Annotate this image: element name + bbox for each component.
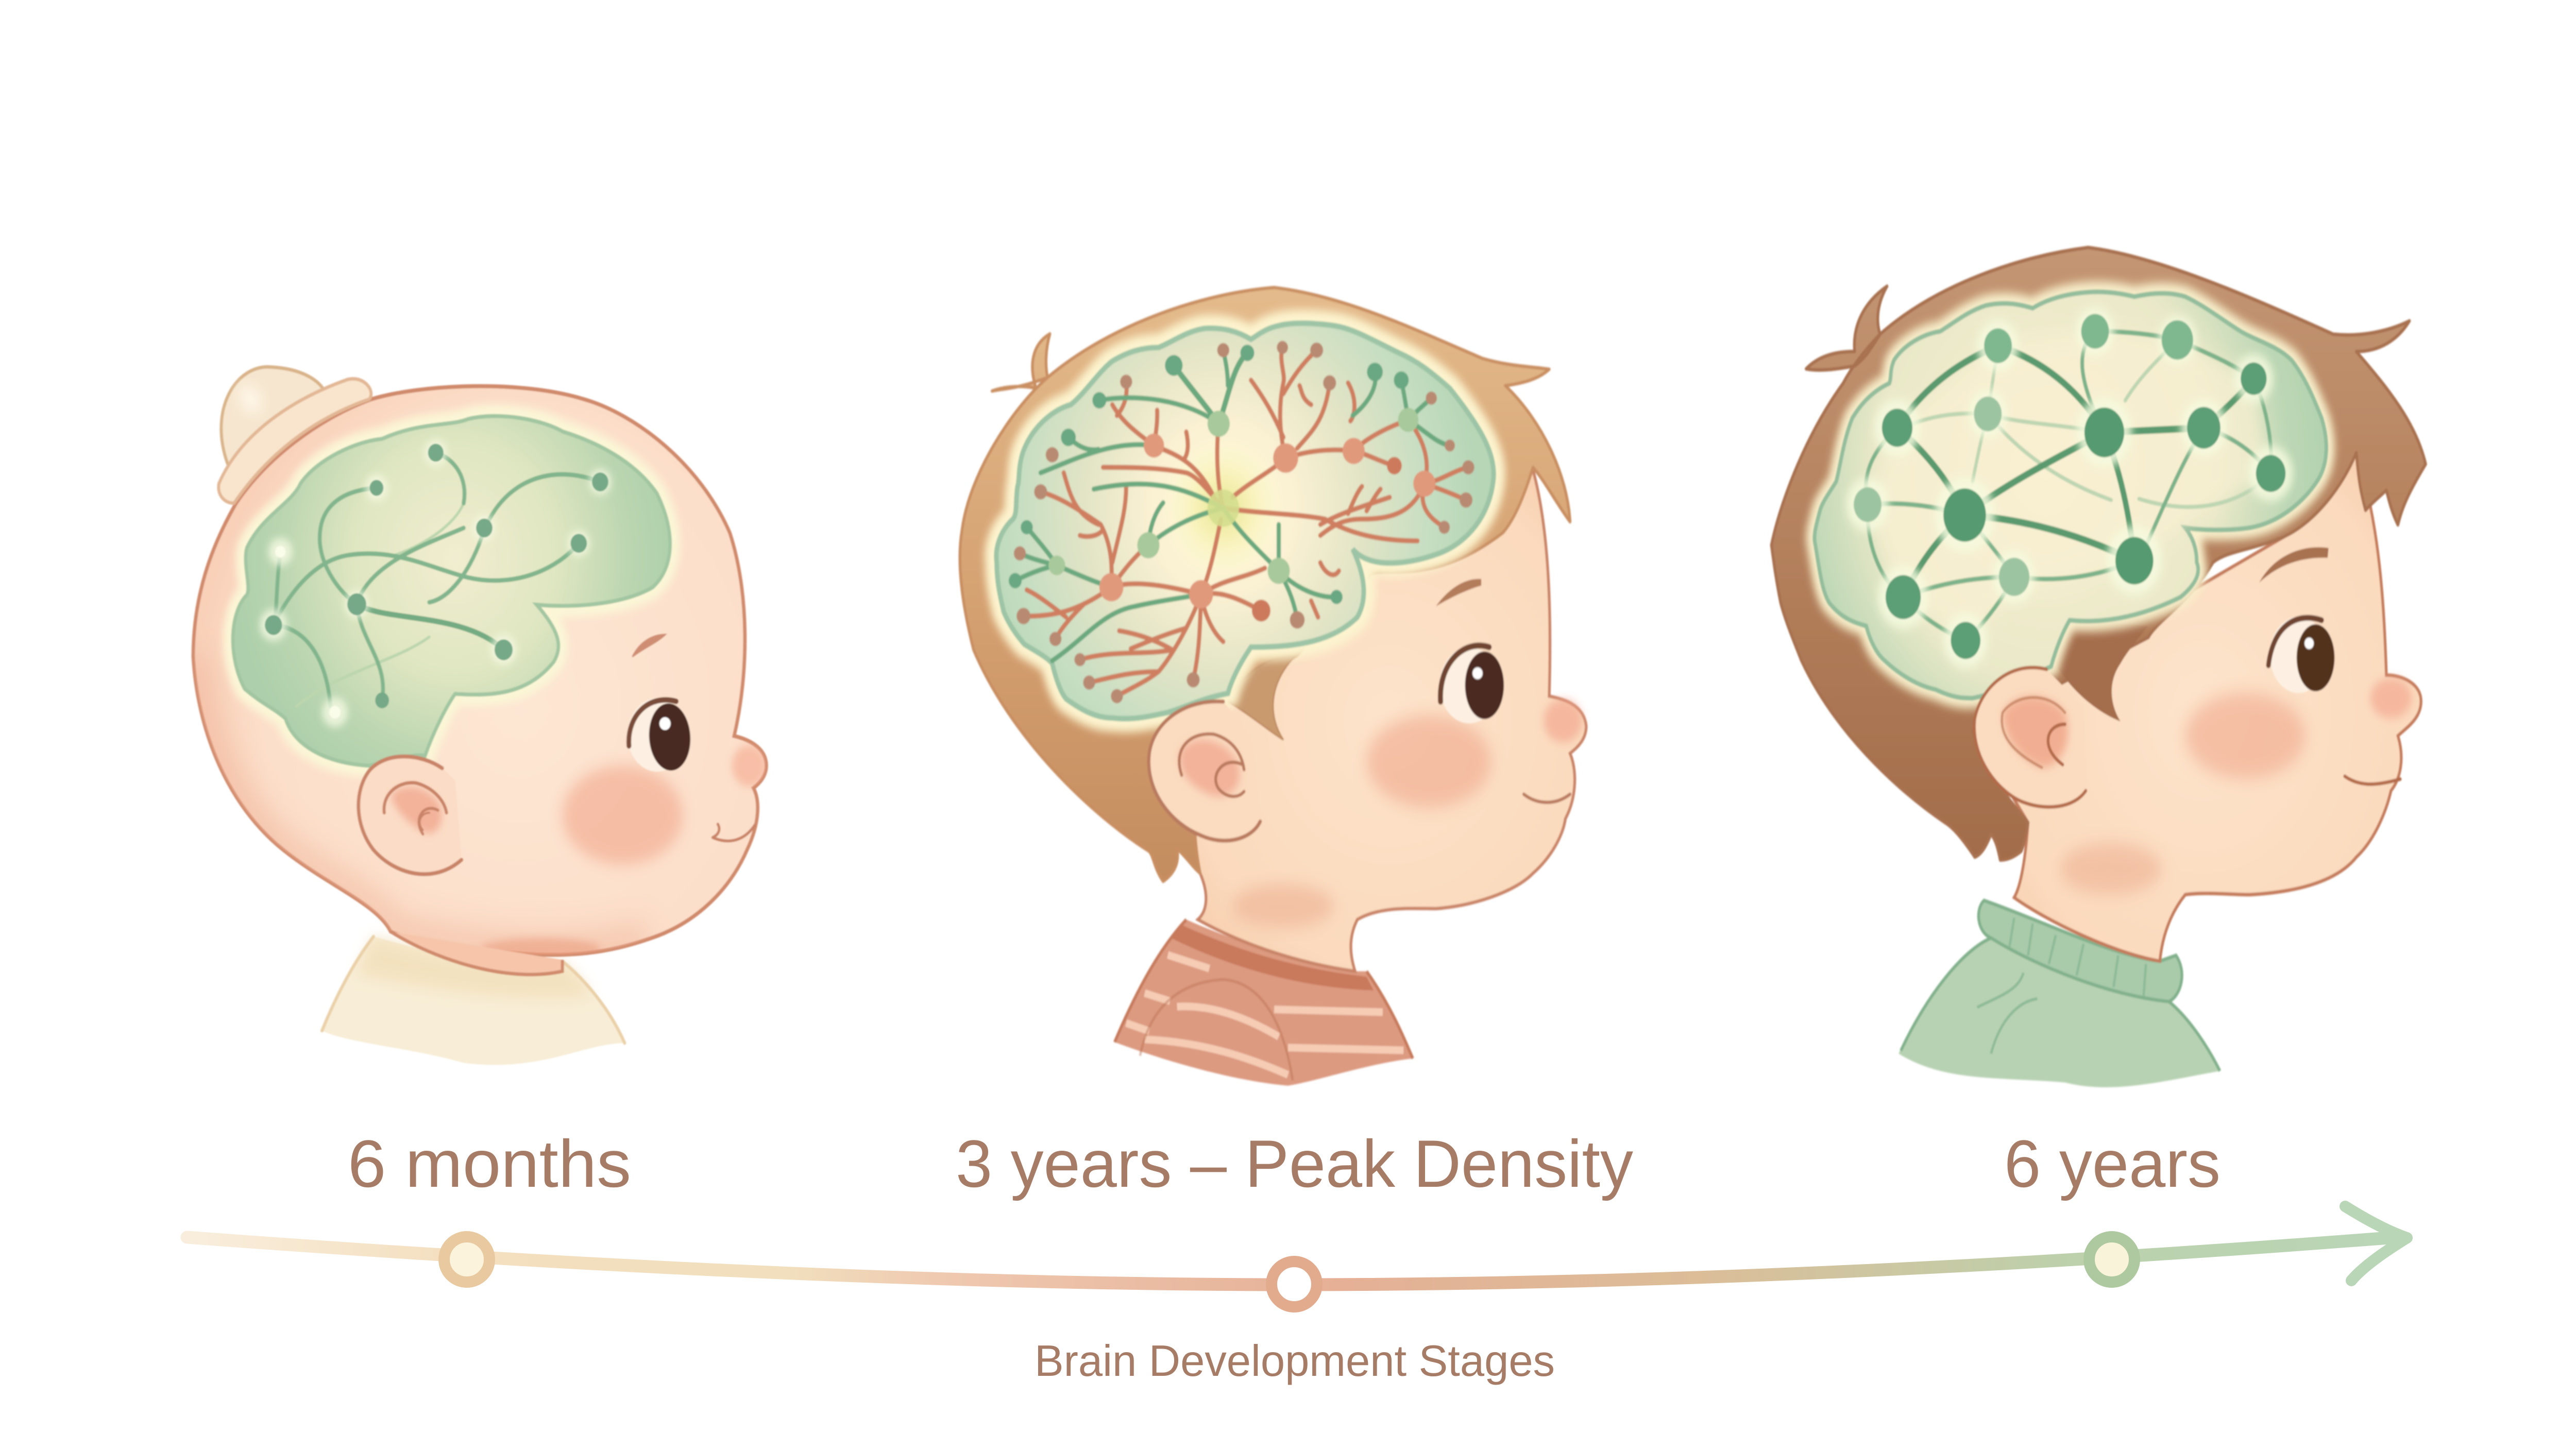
child hair [1771,247,2426,860]
child medium connections [1866,331,2271,640]
toddler eyebrow [1436,579,1481,606]
timeline marker: 6 months [444,1237,489,1282]
child eye [2268,617,2334,693]
toddler face shading [1232,699,1583,928]
timeline marker: 3 years [1272,1262,1317,1307]
child strong connections [1897,346,2253,597]
toddler brain [996,323,1494,719]
toddler sideburn [1228,656,1295,740]
toddler hair [960,287,1570,881]
baby head [193,386,766,955]
soft shading on baby head [193,657,766,960]
baby hat [221,367,326,483]
toddler eye [1439,645,1504,723]
timeline marker: 6 years [2089,1237,2134,1282]
child ear [1974,668,2086,807]
baby eyebrow [632,635,666,657]
timeline arrow [187,1206,2407,1285]
baby brain [233,416,670,766]
child neuron glow [1846,307,2293,668]
baby shirt [322,936,624,1065]
baby ear [359,756,462,874]
child network cream cells [1868,331,2271,640]
head illustration: 6 months baby [193,367,766,1065]
baby neuron nodes [260,440,612,727]
toddler face and neck [1159,470,1586,971]
child eyebrow [2259,547,2329,583]
toddler striped shirt [1114,919,1413,1086]
toddler smile [1524,794,1570,803]
toddler red dendrites [1024,348,1468,696]
timeline caption: Brain Development Stages [1035,1337,1555,1386]
toddler green dendrites [1015,350,1450,661]
baby eye [628,698,693,773]
arrowhead [2345,1206,2407,1281]
toddler neuron hubs [1048,408,1435,622]
neck and collar lines [391,932,563,975]
child neuron nodes [1854,314,2285,659]
toddler central glow [1159,432,1288,585]
child face shading [2060,678,2412,895]
age label: 6 months: 6 months [348,1126,631,1201]
baby neural connections [274,453,600,706]
baby smile [713,824,755,841]
head illustration: 3 years toddler [960,287,1586,1086]
hat brim [218,379,371,503]
child sideburn [2056,620,2148,721]
child green sweater [1899,900,2220,1087]
child brain [1815,292,2326,698]
child smile [2345,776,2400,784]
age label: 3 years peak density: 3 years – Peak Density [956,1126,1633,1201]
toddler dendrite terminals [1009,341,1475,703]
age label: 6 years: 6 years [2004,1126,2221,1201]
head illustration: 6 years child [1771,247,2426,1087]
child faint connections [1912,340,2271,507]
child face and neck [1973,453,2421,961]
toddler ear [1149,702,1260,841]
